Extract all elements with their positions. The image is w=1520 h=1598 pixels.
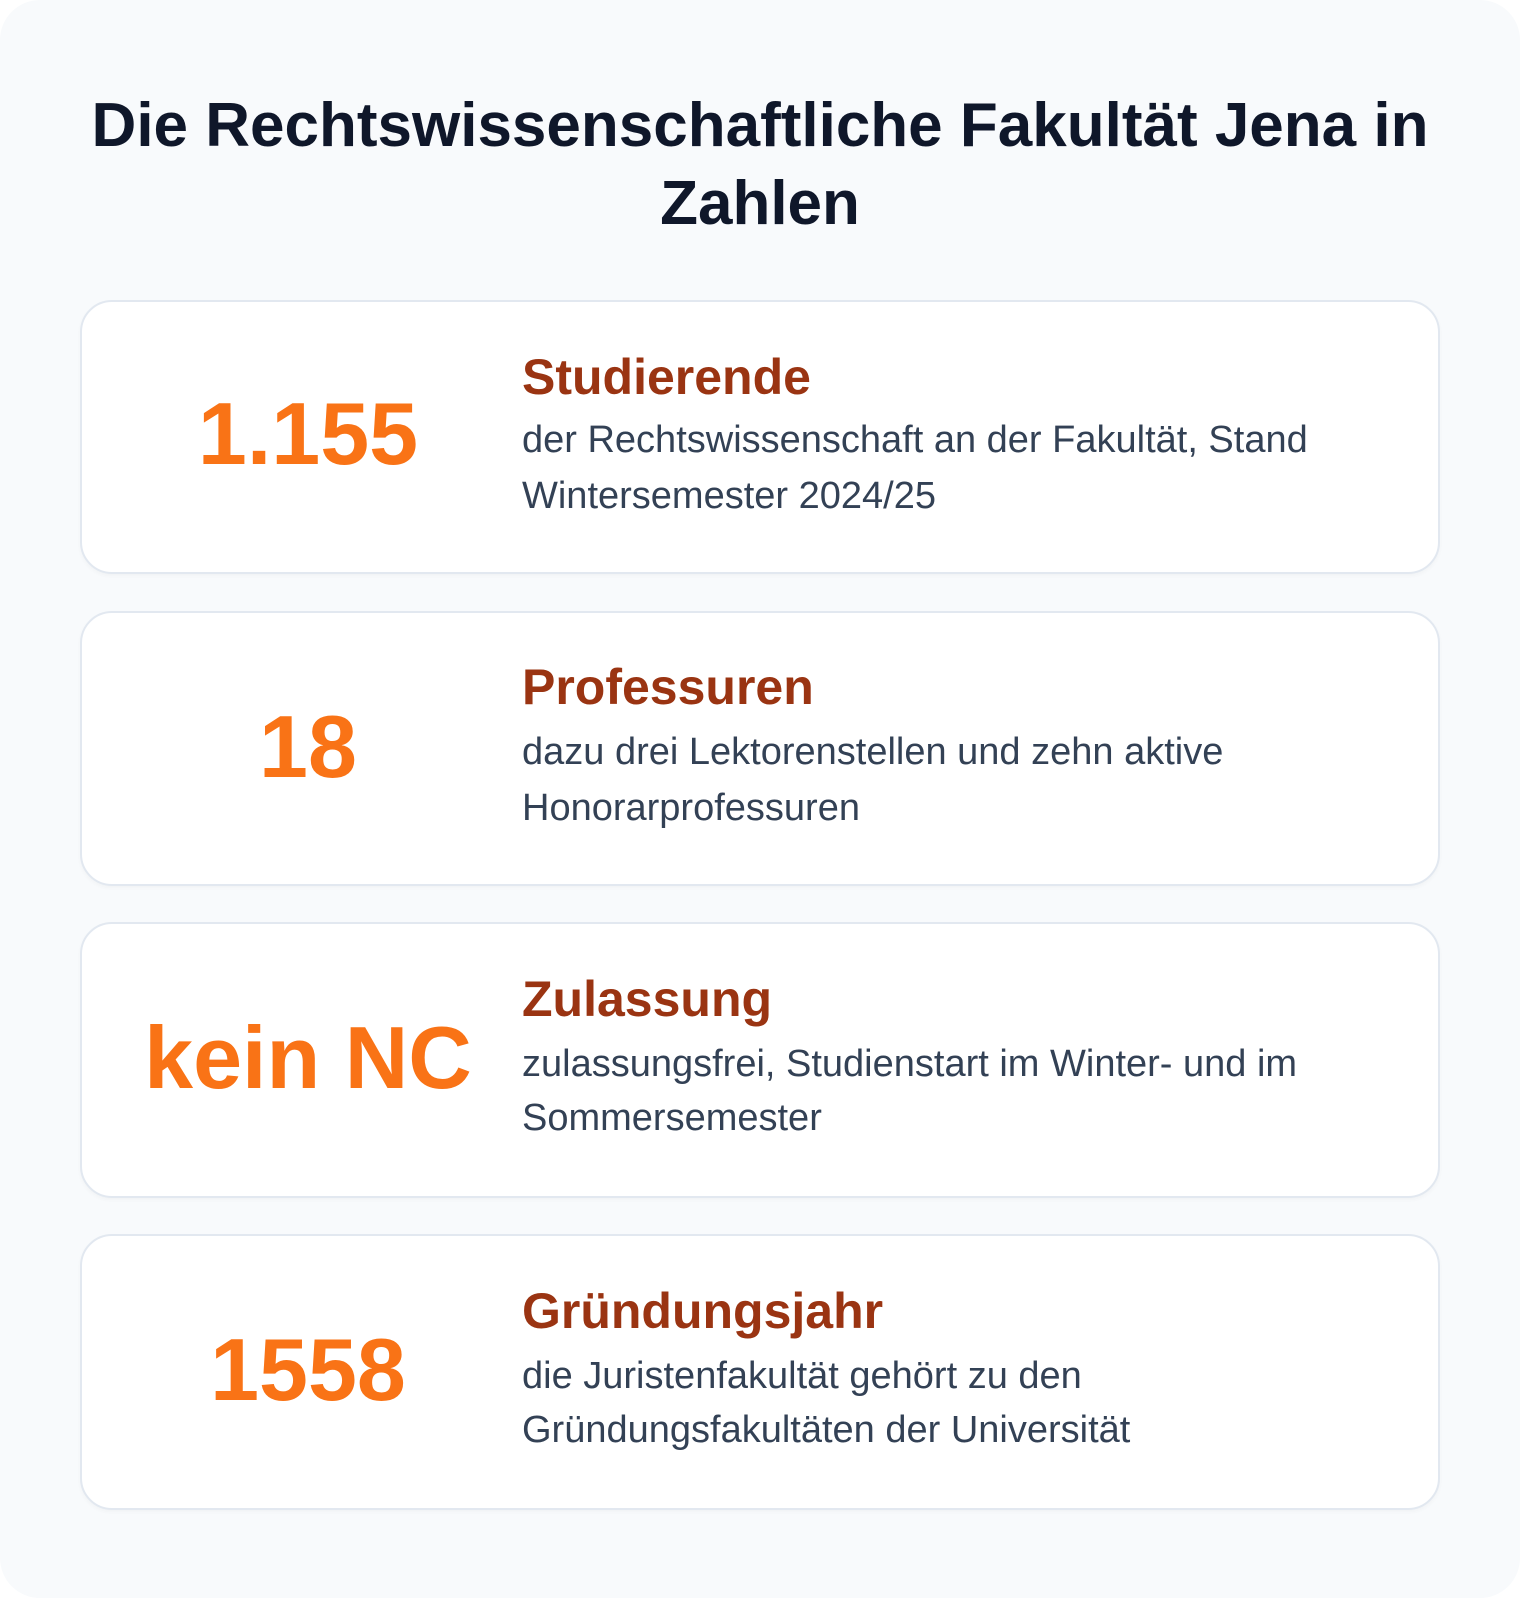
text: Zulassung: Zulassung bbox=[522, 971, 772, 1027]
panel: Professuren bbox=[80, 611, 1440, 886]
panel: Studierende bbox=[80, 300, 1440, 574]
text: Professuren bbox=[522, 659, 1223, 828]
title bbox=[92, 91, 1428, 238]
number: kein NC: kein NC bbox=[144, 1008, 472, 1107]
panel: Zulassung bbox=[80, 922, 1440, 1198]
text: Professuren: Professuren bbox=[522, 659, 814, 715]
number: 1558: 1558 bbox=[210, 1320, 406, 1419]
text: Studierende: Wintersemester 2024/25 bbox=[522, 474, 936, 516]
text: Studierende: der Rechtswissenschaft an der Fakultät, Stand bbox=[522, 418, 1308, 460]
text: Zulassung: Sommersemester bbox=[522, 1096, 822, 1138]
title: Die Rechtswissenschaftliche Fakultät Jena in bbox=[92, 91, 1428, 160]
number: 1.155: 1.155 bbox=[198, 384, 418, 483]
text: Studierende bbox=[522, 349, 1308, 516]
panel: Gründungsjahr bbox=[80, 1234, 1440, 1510]
text: Gründungsjahr bbox=[522, 1283, 1130, 1450]
text: Gründungsjahr: Gründungsjahr bbox=[522, 1283, 883, 1339]
number: 18: 18 bbox=[259, 697, 357, 796]
text: Gründungsjahr: Gründungsfakultäten der Universität bbox=[522, 1408, 1130, 1450]
text: Professuren: dazu drei Lektorenstellen und zehn aktive bbox=[522, 730, 1223, 772]
text: Zulassung: zulassungsfrei, Studienstart im Winter- und im bbox=[522, 1042, 1297, 1084]
text: Professuren: Honorarprofessuren bbox=[522, 786, 860, 828]
text: Gründungsjahr: die Juristenfakultät gehört zu den bbox=[522, 1354, 1082, 1396]
text: Zulassung bbox=[522, 971, 1297, 1138]
title: Zahlen bbox=[660, 169, 860, 238]
text: Studierende: Studierende bbox=[522, 349, 811, 405]
